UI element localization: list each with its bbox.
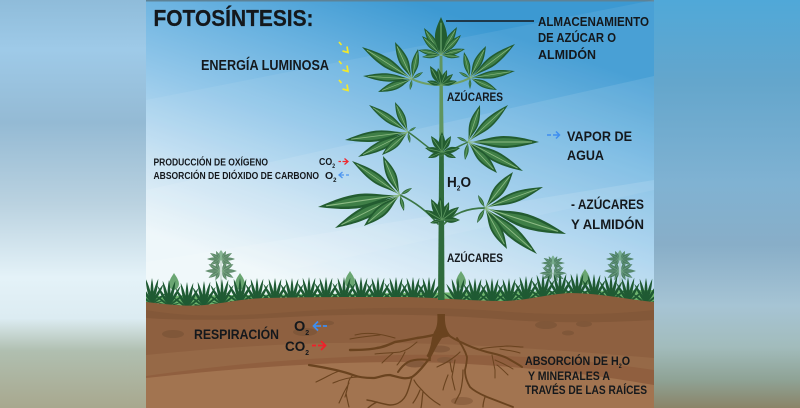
panel: sky [146, 0, 654, 305]
label: absorción raíces: Y MINERALES A [528, 369, 610, 383]
label: absorción raíces: O [622, 354, 630, 368]
top bud [417, 17, 466, 59]
label: H2O: 2 [457, 186, 461, 192]
label: CO2 soil: 2 [305, 350, 309, 357]
grass strip [146, 273, 654, 306]
label: vapor de agua: AGUA [567, 147, 604, 163]
leaf: lower left [317, 154, 413, 234]
label: almacenamiento: ALMIDÓN [538, 47, 596, 62]
label: O2 leaf: O [325, 170, 333, 182]
label: producción y absorción [154, 156, 319, 182]
left blurred background [0, 0, 147, 408]
label: almacenamiento: ALMACENAMIENTO [538, 14, 649, 29]
label: azúcares y almidón: - AZÚCARES [571, 195, 644, 212]
stem and branches [400, 56, 485, 300]
label: O2 leaf: 2 [333, 178, 337, 184]
icon: blue vapor arrow [547, 132, 560, 138]
label: vapor de agua [567, 128, 632, 163]
label: H2O: H [447, 175, 457, 191]
leaf: top left [359, 40, 424, 96]
label: absorción raíces: 2 [619, 364, 622, 370]
label: absorción raíces: ABSORCIÓN DE H [525, 354, 630, 368]
plant [317, 17, 568, 300]
label: producción y absorción: PRODUCCIÓN DE OXÍGENO [154, 156, 268, 168]
label: CO2 leaf: CO [319, 156, 335, 168]
label: O2 soil: O [294, 319, 305, 335]
leaf: top right [458, 40, 518, 93]
icon: blue arrow leaf [339, 172, 349, 178]
label: producción y absorción: ABSORCIÓN DE DIÓXIDO DE CARBONO [154, 169, 319, 182]
title: FOTOSÍNTESIS: [154, 4, 314, 31]
label: energía luminosa: ENERGÍA LUMINOSA [201, 57, 329, 74]
background small plants [169, 250, 636, 290]
label: CO2 leaf: 2 [332, 164, 336, 170]
icon: red arrow soil [312, 341, 326, 350]
label: H2O: O [460, 175, 471, 191]
icon: red arrow leaf [338, 158, 348, 164]
icon: yellow light arrows [339, 42, 348, 90]
label: almacenamiento [538, 14, 649, 62]
second bud [426, 64, 458, 88]
label: O2 soil: 2 [305, 330, 309, 337]
label: almacenamiento: DE AZÚCAR O [538, 30, 616, 45]
fourth bud [423, 197, 461, 225]
label: absorción raíces [525, 353, 647, 397]
leaf: middle left [344, 101, 417, 161]
right blurred background [653, 0, 800, 408]
callout line to top bud [446, 20, 534, 22]
icon: blue arrow soil [314, 322, 327, 330]
leaf: lower right [475, 169, 568, 258]
label: absorción raíces: TRAVÉS DE LAS RAÍCES [525, 382, 647, 397]
panel: soil [146, 293, 654, 408]
label: azúcares lower: AZÚCARES [447, 250, 503, 265]
leaf: middle right [456, 102, 539, 176]
label: azúcares upper: AZÚCARES [447, 89, 503, 104]
label: respiración: RESPIRACIÓN [194, 325, 279, 342]
label: azúcares y almidón [571, 195, 644, 232]
third bud [424, 132, 461, 160]
label: vapor de agua: VAPOR DE [567, 128, 632, 144]
label: azúcares y almidón: Y ALMIDÓN [571, 215, 644, 232]
label: CO2 soil: CO [285, 338, 306, 354]
roots [309, 314, 523, 408]
